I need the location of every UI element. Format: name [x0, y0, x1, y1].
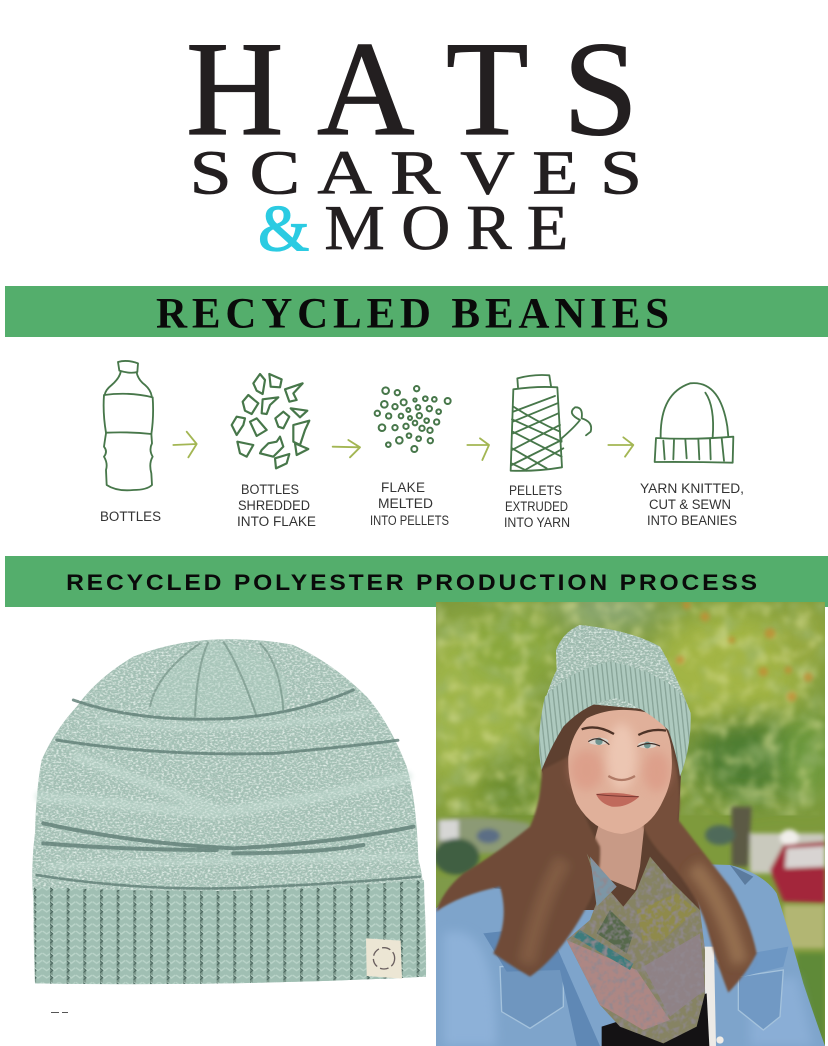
- process steps: last two icons: [467, 375, 733, 471]
- icon: beanie: [655, 383, 733, 463]
- worn beanie: [539, 625, 691, 777]
- caption: flake melted into pellets: [370, 480, 449, 528]
- banner: production process: RECYCLED POLYESTER PRODUCTION PROCESS: [66, 570, 757, 595]
- caption: pellets extruded into yarn: EXTRUDED: [505, 499, 568, 514]
- arrow: step two to three: [333, 440, 360, 457]
- caption: flake melted into pellets: FLAKE: [381, 480, 425, 495]
- dark top and white hood string: [602, 947, 716, 1046]
- caption: yarn knitted cut and sewn into beanies: YARN KNITTED,: [640, 481, 744, 496]
- model photo: woman wearing beanie: [417, 593, 828, 1046]
- light knit highlights: [40, 713, 413, 867]
- beanie ribbed fold: [539, 662, 691, 777]
- logo word MORE: MORE: [324, 193, 568, 264]
- banner: production process: [5, 556, 828, 607]
- paisley scarf: [567, 853, 705, 1043]
- logo word HATS: HATS: [186, 15, 638, 164]
- arrow: step four to five: [608, 437, 633, 457]
- brows, eyes, nose and lips: [582, 727, 666, 807]
- icon: shredded flakes: [232, 374, 309, 468]
- dark knit bands: [37, 690, 420, 888]
- title: brand logo: [186, 15, 642, 266]
- foliage background: [417, 593, 828, 1046]
- hair behind head: [542, 698, 700, 910]
- caption: yarn knitted cut and sewn into beanies: INTO BEANIES: [647, 513, 737, 528]
- caption: bottles: BOTTLES: [100, 509, 161, 524]
- beanie crown: [545, 625, 691, 713]
- caption: pellets extruded into yarn: PELLETS: [509, 483, 562, 498]
- caption: yarn knitted cut and sewn into beanies: [640, 481, 744, 528]
- icon: bottle: [104, 361, 153, 490]
- caption: yarn knitted cut and sewn into beanies: CUT & SEWN: [649, 497, 731, 512]
- process steps: first three icons: [104, 361, 451, 490]
- banner: recycled beanies: RECYCLED BEANIES: [156, 290, 669, 338]
- banner: recycled beanies: [5, 286, 828, 338]
- crown gathered panel: [150, 642, 287, 719]
- fabric recycle tag: [366, 938, 402, 979]
- ribbed cuff: [34, 880, 426, 984]
- woman's neck: [594, 825, 644, 890]
- caption: bottles shredded into flake: BOTTLES: [241, 482, 299, 497]
- caption: bottles shredded into flake: INTO FLAKE: [237, 514, 316, 529]
- crown pleats: [150, 642, 283, 717]
- beanie body with knit texture: [32, 639, 426, 984]
- arrow: step one to two: [173, 432, 197, 457]
- caption: flake melted into pellets: INTO PELLETS: [370, 513, 449, 528]
- product photo: knit beanie: [32, 639, 426, 984]
- logo word SCARVES: SCARVES: [190, 138, 642, 208]
- denim jacket: [436, 860, 825, 1046]
- face: [568, 710, 672, 834]
- caption: bottles shredded into flake: [237, 482, 316, 529]
- small cropped mark: [51, 1012, 68, 1013]
- long brown hair: [436, 743, 757, 993]
- logo ampersand: &: [258, 192, 309, 266]
- icon: yarn cone: [511, 375, 591, 471]
- blurred background street scene: [434, 807, 825, 1046]
- caption: pellets extruded into yarn: INTO YARN: [504, 515, 570, 530]
- caption: pellets extruded into yarn: [504, 483, 570, 530]
- step captions: [100, 480, 744, 530]
- caption: bottles shredded into flake: SHREDDED: [238, 498, 310, 513]
- icon: pellets: [375, 386, 451, 452]
- arrow: step three to four: [467, 438, 489, 460]
- caption: flake melted into pellets: MELTED: [378, 496, 433, 511]
